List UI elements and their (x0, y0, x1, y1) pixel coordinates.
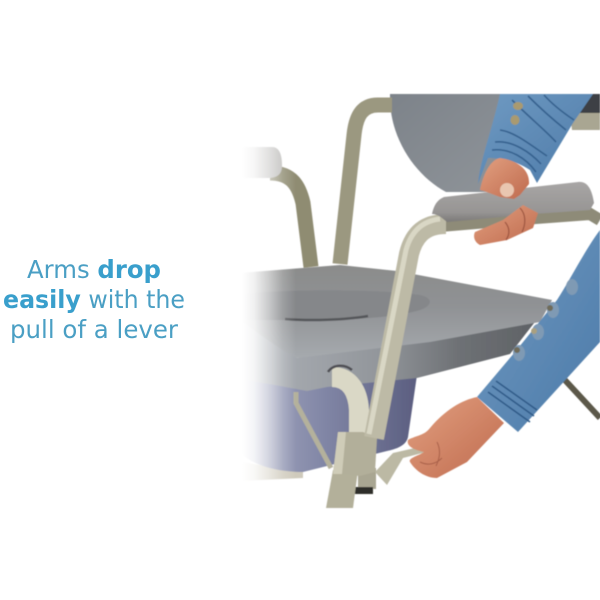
rear right leg (563, 378, 600, 418)
upper hand fingers (474, 205, 538, 245)
caption text: pull of a lever (10, 315, 179, 344)
support rod (296, 392, 331, 468)
upper hand back (480, 158, 529, 199)
thumbnail (500, 183, 514, 197)
seat hole (240, 290, 430, 320)
rear right frame tube (340, 105, 392, 264)
lower sleeve (477, 230, 600, 432)
left armrest pad (240, 147, 282, 178)
floor shadow (240, 462, 303, 481)
upper sleeve (478, 94, 593, 184)
caption text: easily with the (3, 285, 185, 314)
seat top surface (240, 265, 552, 358)
left edge fade (236, 130, 296, 490)
armrest pad right (432, 182, 594, 222)
sleeve buttons (510, 102, 523, 125)
left armrest tube (270, 173, 311, 267)
lower hand (408, 397, 504, 478)
commode chair photo illustration (240, 94, 600, 508)
caption text: Arms drop (27, 255, 161, 284)
right armrest horizontal tube (440, 214, 600, 226)
waste bucket (240, 375, 417, 472)
sleeve ruffles (513, 279, 578, 361)
release lever (375, 445, 430, 485)
caption text (3, 255, 185, 344)
seat underside (240, 300, 552, 391)
bracket (333, 432, 377, 476)
inner tube and foot (353, 468, 376, 494)
curved seat tube (332, 377, 359, 440)
lower leg (326, 470, 358, 508)
front frame tube (374, 224, 446, 438)
upper frame behind sleeve (570, 113, 600, 130)
chair backrest (390, 94, 505, 192)
